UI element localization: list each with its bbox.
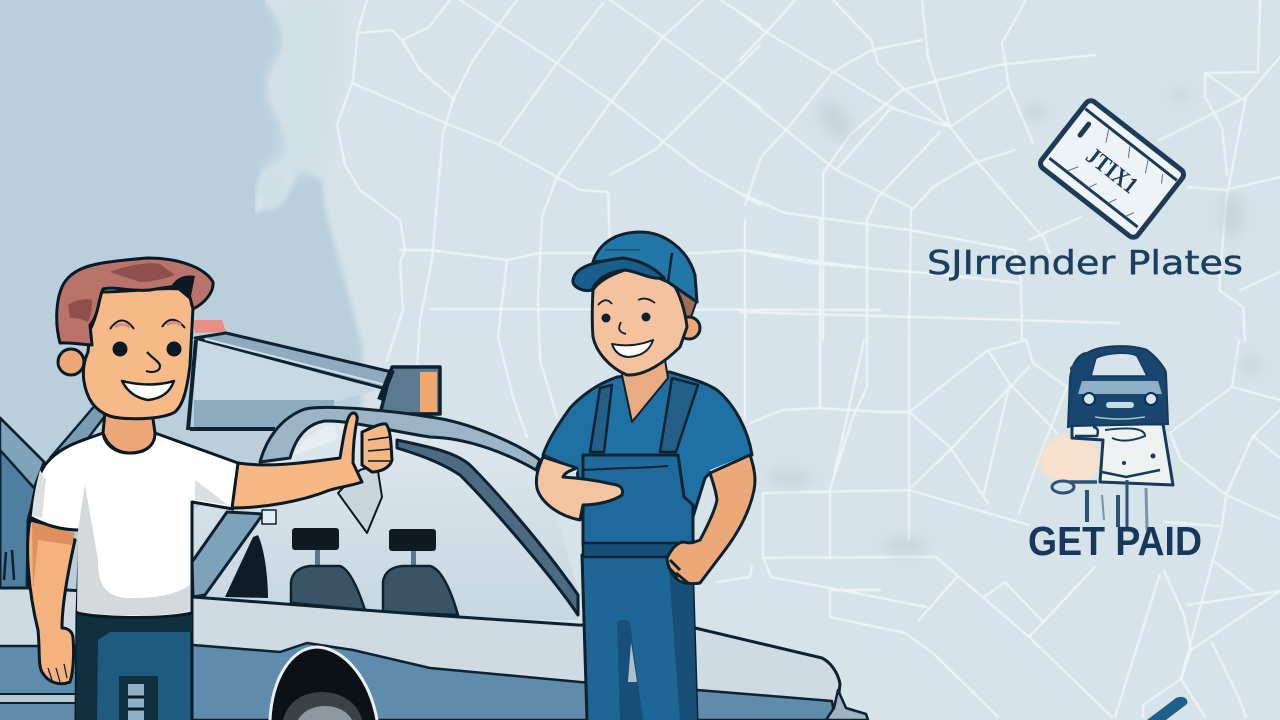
man: neck — [103, 412, 155, 453]
mechanic: belt — [583, 543, 693, 557]
icon: license plate: JTIX1 — [1081, 143, 1142, 199]
mechanic: bib — [583, 455, 693, 545]
man: upper arm shading — [32, 522, 75, 590]
person: mechanic in blue overalls — [536, 232, 755, 720]
mechanic: face — [592, 270, 687, 375]
car: cabin window — [193, 408, 578, 620]
person: smiling man holding keys — [28, 258, 392, 720]
man: lowered arm and hand — [28, 520, 75, 684]
man: hair — [57, 258, 213, 345]
man: face — [83, 289, 193, 419]
label: get paid: GET PAID — [1028, 518, 1202, 564]
label: surrender plates: SJIrrender Plates — [927, 243, 1243, 282]
icon: car over cash payment — [1040, 346, 1173, 530]
mechanic: suspenders — [590, 378, 698, 452]
man: fist — [362, 424, 392, 472]
man: trousers — [76, 612, 192, 720]
mechanic: bib pocket line — [584, 466, 668, 470]
car: front seat — [291, 528, 365, 610]
car: door pillar — [192, 510, 276, 598]
man: white t-shirt — [30, 433, 238, 618]
icon: pen tip at bottom right — [1147, 697, 1187, 720]
car: roof frame — [260, 407, 540, 470]
car: raised boom arm — [50, 320, 440, 462]
man: eyes, brows, nose and smile — [110, 320, 185, 400]
mechanic: leg gap — [628, 642, 637, 682]
man: shirt shading — [77, 485, 190, 616]
car: windshield pillar — [397, 440, 578, 615]
car: blue lower body — [0, 643, 835, 720]
car: glare inside roof frame — [293, 425, 336, 456]
man: sleeve shading — [32, 470, 228, 518]
mechanic: ear and hair — [675, 285, 700, 339]
car: front wheel — [270, 647, 377, 720]
mechanic: left arm and hand — [536, 457, 623, 520]
mechanic: eyes, brows, nose and smile — [598, 299, 655, 357]
mechanic: leg side shading — [668, 557, 697, 720]
mechanic: shirt — [543, 372, 752, 520]
map: faint smudges — [768, 90, 1260, 554]
man: extended arm and thumb — [232, 413, 362, 508]
mechanic: fingers on hip — [668, 560, 688, 583]
mechanic: inner leg shading — [617, 620, 643, 720]
car: lower trim — [0, 694, 78, 720]
man: finger lines — [48, 664, 67, 682]
mechanic: sleeve cuffs — [543, 454, 752, 476]
background: pale blob on the shore — [260, 170, 284, 210]
car: left door — [0, 418, 44, 590]
man: key fob — [338, 465, 382, 533]
car: light upper body panel — [0, 588, 840, 720]
car: rear bumper — [826, 690, 868, 720]
man: ear — [58, 349, 84, 375]
car — [0, 320, 868, 720]
mechanic: trousers — [582, 555, 697, 720]
mechanic: neck and collar — [622, 360, 668, 422]
car: rear seat — [383, 529, 458, 615]
mechanic: cap — [573, 232, 697, 302]
background: water along the coast — [0, 0, 362, 660]
map: road network — [337, 0, 1280, 717]
man: finger creases — [368, 437, 391, 461]
background: pale coastal shallows — [262, 0, 340, 178]
icon: license plate — [1038, 98, 1186, 240]
mechanic: right arm and hand on hip — [667, 455, 755, 584]
